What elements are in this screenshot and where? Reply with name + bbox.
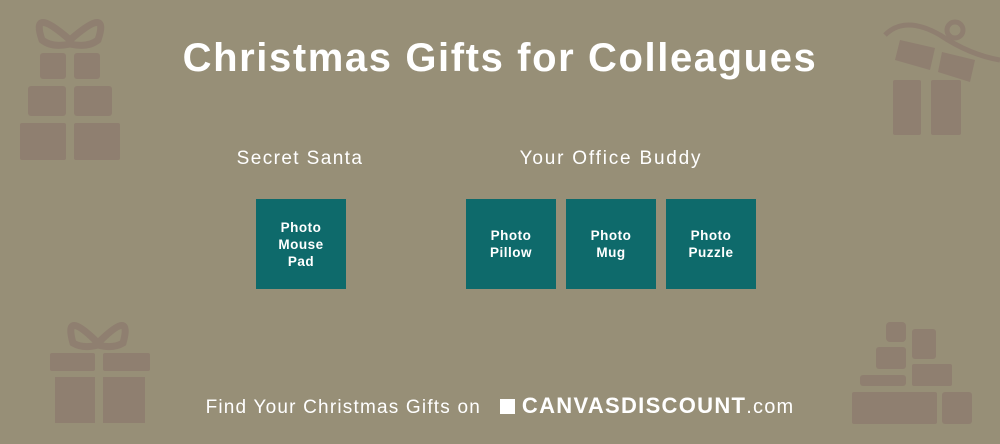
icon: stacked gifts bottom-right bbox=[852, 322, 972, 424]
box: Photo Mouse Pad: Photo bbox=[281, 220, 321, 234]
box: Photo Puzzle bbox=[666, 199, 756, 289]
icon: gift top-right bbox=[884, 20, 1000, 135]
box: Photo Mouse Pad: Pad bbox=[288, 254, 314, 268]
box: Photo Mouse Pad: Mouse bbox=[278, 236, 324, 252]
heading: Your Office Buddy: Your Office Buddy bbox=[520, 148, 702, 169]
box: Photo Pillow bbox=[466, 199, 556, 289]
box: Photo Pillow: Pillow bbox=[490, 245, 532, 260]
icon: gift bottom-left bbox=[50, 322, 150, 423]
box: Photo Mug bbox=[566, 199, 656, 289]
icon: stacked gifts top-left bbox=[20, 19, 120, 160]
title: Christmas Gifts for Colleagues bbox=[183, 36, 817, 80]
box: Photo Puzzle: Photo bbox=[691, 228, 731, 243]
box: Photo Mug: Mug bbox=[596, 245, 626, 260]
box: Photo Puzzle: Puzzle bbox=[688, 245, 734, 260]
heading: Secret Santa: Secret Santa bbox=[237, 148, 363, 169]
footer: Find Your Christmas Gifts on CANVASDISCOUNT.com bbox=[206, 393, 794, 418]
box: Photo Mouse Pad bbox=[256, 199, 346, 289]
box: Photo Pillow: Photo bbox=[491, 228, 531, 243]
box: Photo Mug: Photo bbox=[591, 228, 631, 243]
